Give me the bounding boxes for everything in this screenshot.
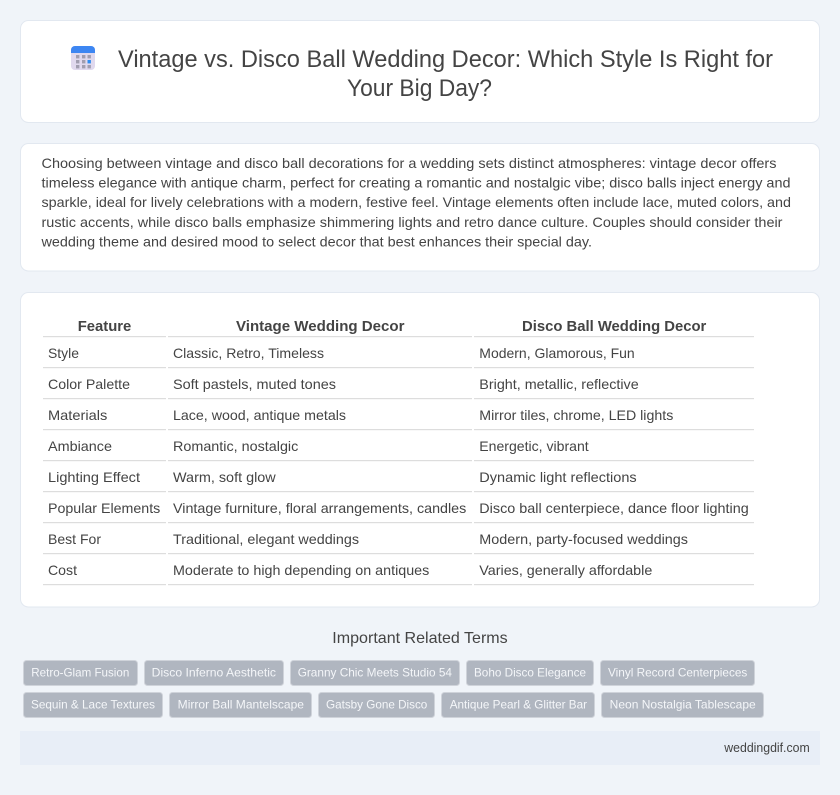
table header row: Vintage Wedding Decor <box>236 318 405 335</box>
table row: cost: Moderate to high depending on antiques <box>173 562 429 578</box>
table row: color palette: Bright, metallic, reflective <box>479 376 639 392</box>
heading: important related terms: Important Related Terms <box>332 630 508 647</box>
table row: materials: Lace, wood, antique metals <box>173 407 346 423</box>
title <box>118 46 773 102</box>
table row: cost: Cost <box>48 562 77 578</box>
footer source text: weddingdif.com <box>723 741 810 755</box>
table row: popular elements: Vintage furniture, floral arrangements, candles <box>173 500 466 516</box>
table row: style: Classic, Retro, Timeless <box>173 345 324 361</box>
tag <box>144 660 284 686</box>
text block: introduction paragraph: wedding theme and desired mood to select decor that best enhances their special day. <box>40 233 592 249</box>
table row: best for: Traditional, elegant weddings <box>173 531 359 547</box>
tag <box>442 692 594 718</box>
table row: lighting effect: Lighting Effect <box>48 469 140 485</box>
table row: lighting effect: Dynamic light reflections <box>479 469 637 485</box>
text block: introduction paragraph: sparkle, ideal for lively celebrations with a modern, festive feel. Vintage elements often include lace, muted colors, and <box>42 194 791 210</box>
tag: Mirror Ball Mantelscape <box>178 698 304 712</box>
table header row <box>43 318 754 337</box>
icon: calendar <box>71 46 95 70</box>
title: Your Big Day? <box>347 75 492 102</box>
panel: introduction <box>20 144 820 271</box>
tag: Antique Pearl & Glitter Bar <box>450 698 587 712</box>
text block: introduction paragraph: Choosing between vintage and disco ball decorations for a wedding sets distinct atmospheres: vintage decor offers <box>42 155 777 171</box>
table row: materials: Mirror tiles, chrome, LED lights <box>479 407 673 423</box>
table header row: Feature <box>78 318 131 335</box>
table row: ambiance <box>43 438 754 461</box>
text block: introduction paragraph: rustic accents, while disco balls emphasize shimmering lights and retro dance culture. Couples should consider their <box>42 214 783 230</box>
tag: Gatsby Gone Disco <box>326 698 428 712</box>
tag: Neon Nostalgia Tablescape <box>610 698 756 712</box>
title: Vintage vs. Disco Ball Wedding Decor: Which Style Is Right for <box>118 46 773 73</box>
table row: ambiance: Ambiance <box>48 438 112 454</box>
table row: popular elements: Disco ball centerpiece, dance floor lighting <box>479 500 749 516</box>
footer <box>20 731 820 765</box>
table row: color palette: Color Palette <box>48 376 130 392</box>
tag <box>24 692 162 718</box>
panel: header <box>20 20 820 122</box>
tag <box>600 660 754 686</box>
tag: Retro-Glam Fusion <box>31 666 129 680</box>
text block: introduction paragraph <box>40 155 791 249</box>
table row: materials: Materials <box>48 407 107 423</box>
table header row: Disco Ball Wedding Decor <box>522 318 706 335</box>
table row: style: Style <box>48 345 79 361</box>
table row: style: Modern, Glamorous, Fun <box>479 345 635 361</box>
table row: popular elements <box>43 500 754 523</box>
tag <box>24 660 138 686</box>
table row: color palette: Soft pastels, muted tones <box>173 376 336 392</box>
table row: best for: Modern, party-focused weddings <box>479 531 688 547</box>
table row: cost <box>43 562 754 585</box>
table row: lighting effect <box>43 469 754 492</box>
tag list: related terms <box>24 660 764 718</box>
panel: comparison table <box>20 292 820 607</box>
table row: color palette <box>43 376 754 399</box>
tag <box>602 692 764 718</box>
tag: Granny Chic Meets Studio 54 <box>298 666 452 680</box>
table row: best for <box>43 531 754 554</box>
table row: lighting effect: Warm, soft glow <box>173 469 277 485</box>
table row: ambiance: Energetic, vibrant <box>479 438 589 454</box>
table row: popular elements: Popular Elements <box>48 500 160 516</box>
table row: style <box>43 345 754 368</box>
table row: best for: Best For <box>48 531 101 547</box>
tag <box>466 660 594 686</box>
tag: Boho Disco Elegance <box>474 666 586 680</box>
tag: Sequin & Lace Textures <box>31 698 155 712</box>
table row: cost: Varies, generally affordable <box>479 562 653 578</box>
tag <box>290 660 460 686</box>
tag: Disco Inferno Aesthetic <box>152 666 276 680</box>
table row: materials <box>43 407 754 430</box>
table row: ambiance: Romantic, nostalgic <box>173 438 298 454</box>
tag <box>318 692 434 718</box>
tag <box>170 692 312 718</box>
tag: Vinyl Record Centerpieces <box>608 666 747 680</box>
text block: introduction paragraph: timeless elegance with antique charm, perfect for creating a romantic and nostalgic vibe; disco balls inject energy and <box>42 175 790 191</box>
